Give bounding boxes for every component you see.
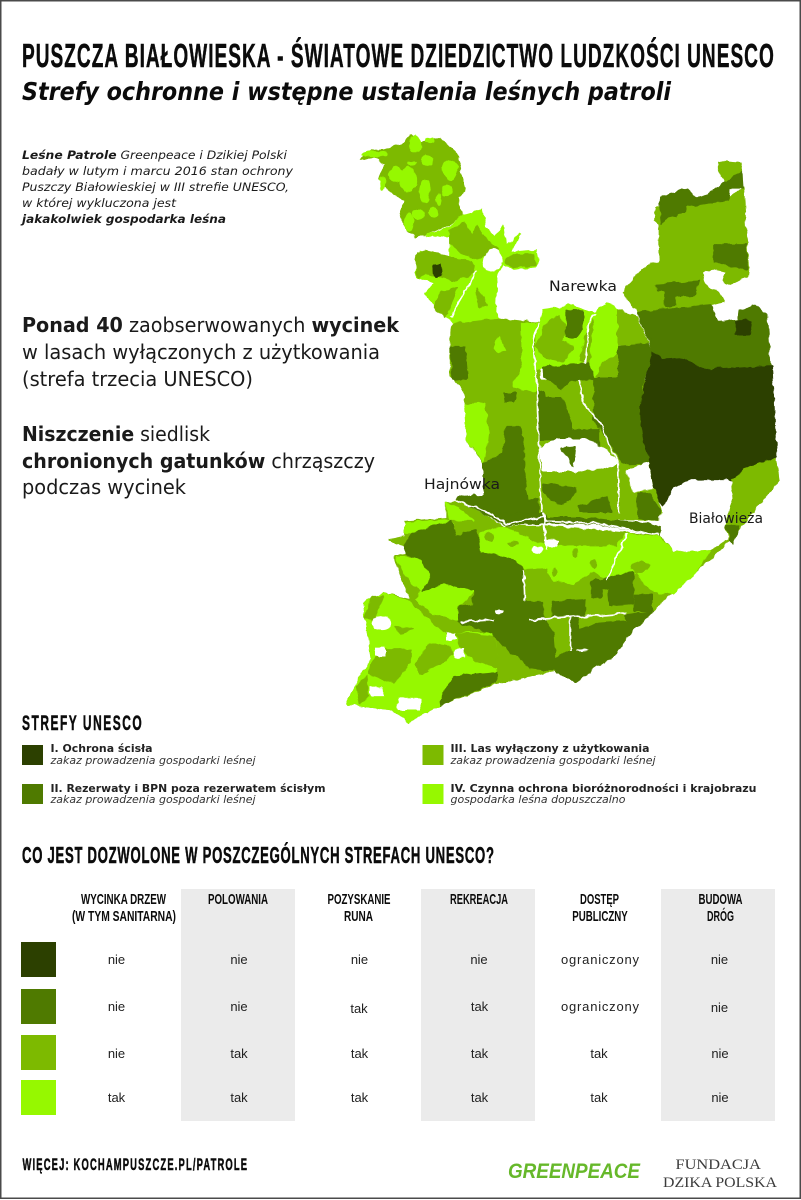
- strict protection zone: [641, 352, 777, 505]
- legend: zone III: III. Las wyłączony z użytkowania: [450, 742, 650, 755]
- column headers: DOSTĘP: [580, 891, 619, 908]
- key finding: cuts: Ponad 40 zaobserwowanych wycinek: [22, 313, 400, 337]
- key finding: habitats: podczas wycinek: [22, 475, 186, 499]
- legend: zone IV: gospodarka leśna dopuszczalno: [450, 794, 626, 806]
- column headers: [72, 891, 743, 925]
- key finding: habitats: Niszczenie siedlisk: [22, 422, 210, 446]
- row 1: zone I: nie: [351, 952, 368, 967]
- row 3: zone III: tak: [351, 1046, 369, 1061]
- row 3: zone III: nie: [108, 1046, 125, 1061]
- town label: Hajnówka: Hajnówka: [424, 477, 500, 493]
- intro text block: Leśne Patrole Greenpeace i Dzikiej Polski: [22, 148, 288, 162]
- row 2: zone II: nie: [230, 999, 248, 1014]
- column headers: REKREACJA: [450, 891, 508, 908]
- east strip: [725, 458, 778, 540]
- column headers: PUBLICZNY: [572, 908, 628, 925]
- column headers: RUNA: [344, 908, 373, 925]
- row 4: zone IV: tak: [590, 1090, 608, 1105]
- key finding: cuts: w lasach wyłączonych z użytkowania: [22, 340, 380, 364]
- central west column: [451, 319, 543, 514]
- forest zone map: [347, 135, 778, 722]
- legend: zone III: [422, 742, 656, 767]
- legend: zone I: I. Ochrona ścisła: [50, 742, 152, 755]
- permissions table: [21, 889, 775, 1121]
- row 2: zone II: tak: [350, 1001, 368, 1016]
- intro text block: w której wykluczona jest: [22, 196, 177, 210]
- row 3: zone III: tak: [230, 1046, 248, 1061]
- intro text block: [20, 148, 293, 226]
- row 4: zone IV: tak: [471, 1090, 489, 1105]
- legend: zone III: zakaz prowadzenia gospodarki leśnej: [449, 755, 656, 767]
- row 2: zone II: tak: [471, 999, 489, 1014]
- legend: zone IV: [422, 782, 756, 806]
- row 4: zone IV: tak: [351, 1090, 369, 1105]
- legend: zone I: zakaz prowadzenia gospodarki leśnej: [49, 755, 256, 767]
- north-middle forest cluster: [416, 210, 539, 324]
- logo: Fundacja Dzika Polska: FUNDACJA: [676, 1157, 762, 1173]
- column headers: BUDOWA: [698, 891, 743, 908]
- legend: zone IV: IV. Czynna ochrona bioróżnorodności i krajobrazu: [450, 782, 756, 795]
- row 1: zone I: [21, 942, 728, 977]
- legend: zone II: II. Rezerwaty i BPN poza rezerwatem ścisłym: [50, 782, 326, 795]
- table heading: CO JEST DOZWOLONE W POSZCZEGÓLNYCH STREFACH UNESCO?: [22, 842, 494, 868]
- column headers: POZYSKANIE: [328, 891, 390, 908]
- row 1: zone I: nie: [108, 952, 125, 967]
- logo: Greenpeace: GREENPEACE: [508, 1160, 641, 1183]
- shaded columns: [181, 889, 775, 1121]
- key finding: habitats: [22, 422, 375, 499]
- row 3: zone III: tak: [590, 1046, 608, 1061]
- Białowieża clearing: [660, 478, 733, 550]
- legend: zone I: [22, 742, 256, 767]
- north-east forest: [623, 162, 748, 313]
- small strict zone: [736, 321, 751, 334]
- intro text block: Puszczy Białowieskiej w III strefie UNESCO,: [22, 180, 289, 194]
- column headers: WYCINKA DRZEW: [81, 891, 167, 908]
- legend: zone II: [22, 782, 326, 806]
- central patchwork: [533, 303, 662, 520]
- row 1: zone I: nie: [711, 952, 728, 967]
- title: PUSZCZA BIAŁOWIESKA - ŚWIATOWE DZIEDZICTWO LUDZKOŚCI UNESCO: [22, 36, 774, 74]
- intro text block: badały w lutym i marcu 2016 stan ochrony: [22, 164, 293, 178]
- row 1: zone I: ograniczony: [561, 952, 640, 967]
- subtitle: Strefy ochronne i wstępne ustalenia leśnych patroli: [22, 77, 671, 106]
- row 3: zone III: tak: [471, 1046, 489, 1061]
- row 4: zone IV: tak: [230, 1090, 248, 1105]
- row 1: zone I: nie: [230, 952, 248, 967]
- intro text block: jakakolwiek gospodarka leśna: [20, 212, 226, 226]
- east zone II forest: [637, 305, 770, 369]
- row 1: zone I: nie: [470, 952, 488, 967]
- legend heading: STREFY UNESCO: [22, 712, 142, 735]
- column headers: POLOWANIA: [208, 891, 268, 908]
- row 2: zone II: nie: [711, 1000, 728, 1015]
- row 3: zone III: [21, 1035, 729, 1070]
- row 4: zone IV: tak: [108, 1090, 126, 1105]
- footer link: WIĘCEJ: KOCHAMPUSZCZE.PL/PATROLE: [22, 1155, 247, 1174]
- logo: Fundacja Dzika Polska: [663, 1157, 778, 1191]
- key finding: cuts: (strefa trzecia UNESCO): [22, 367, 253, 391]
- key finding: habitats: chronionych gatunków chrząszczy: [22, 449, 375, 473]
- row 2: zone II: ograniczony: [561, 999, 640, 1014]
- small zone II near Białowieża: [725, 527, 738, 543]
- row 3: zone III: nie: [711, 1046, 729, 1061]
- row 4: zone IV: nie: [711, 1090, 729, 1105]
- row 4: zone IV: [21, 1080, 729, 1115]
- town label: Narewka: Narewka: [549, 279, 617, 295]
- town label: Białowieża: Białowieża: [689, 511, 763, 527]
- legend: zone II: zakaz prowadzenia gospodarki leśnej: [49, 794, 256, 806]
- southern forest: [347, 495, 730, 722]
- north forest blob: [362, 135, 465, 237]
- column headers: (W TYM SANITARNA): [72, 908, 176, 925]
- key finding: cuts: [22, 313, 400, 391]
- row 2: zone II: [21, 989, 728, 1024]
- column headers: DRÓG: [707, 907, 734, 925]
- row 2: zone II: nie: [108, 999, 125, 1014]
- logo: Fundacja Dzika Polska: DZIKA POLSKA: [663, 1175, 778, 1191]
